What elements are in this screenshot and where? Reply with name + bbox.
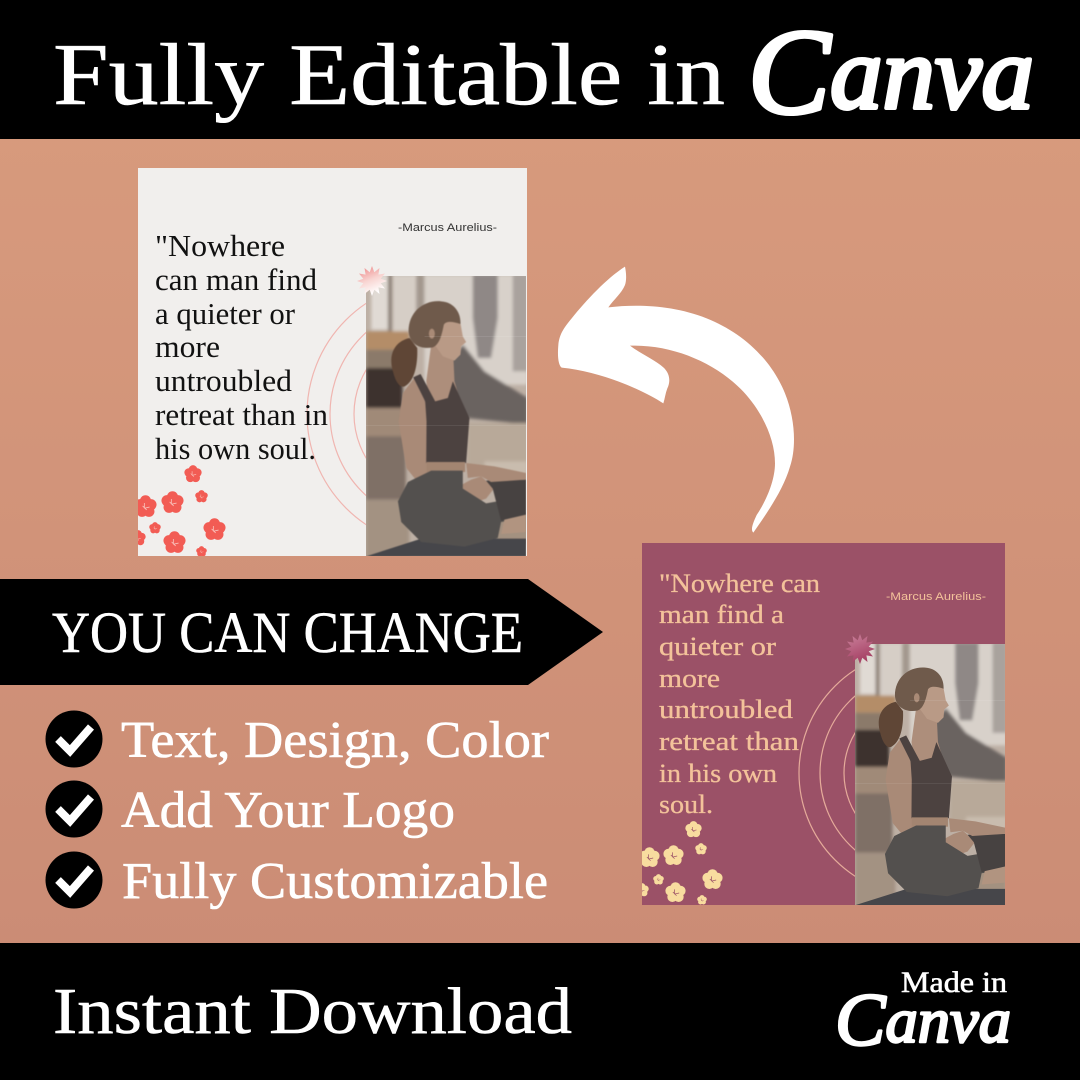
- instant download text: Instant Download: [53, 975, 572, 1048]
- title: Canva logo: anva: [830, 16, 1034, 131]
- arrow: curved white arrow: [558, 267, 794, 533]
- quote text: a quieter or: [155, 296, 296, 331]
- quote text: in his own: [659, 759, 777, 788]
- quote text: retreat than: [659, 727, 799, 756]
- quote text: man find a: [659, 600, 785, 629]
- icon: red flowers: [130, 465, 226, 556]
- panel: light quote card: [138, 168, 527, 556]
- icon: star burst: [845, 634, 875, 664]
- icon: star burst: [357, 266, 387, 296]
- quote text: [659, 569, 820, 819]
- made in Canva logo: C: [835, 979, 886, 1062]
- quote text: more: [659, 664, 720, 693]
- quote text: "Nowhere can: [659, 569, 820, 598]
- attribution: -Marcus Aurelius-: [886, 591, 986, 603]
- quote text: more: [155, 329, 220, 364]
- item: text, design, color: Text, Design, Color: [121, 712, 549, 769]
- quote text: can man find: [155, 262, 317, 297]
- made in Canva logo: anva: [885, 985, 1011, 1056]
- icon: cream flowers: [635, 821, 723, 904]
- photo: woman meditating: [366, 275, 528, 558]
- attribution: -Marcus Aurelius-: [398, 222, 497, 234]
- banner: you can change: [0, 579, 603, 685]
- banner heading: YOU CAN CHANGE: [52, 600, 523, 665]
- concentric arcs: [306, 303, 366, 526]
- item: add your logo: Add Your Logo: [121, 782, 455, 839]
- item: fully customizable: Fully Customizable: [122, 853, 548, 910]
- quote text: retreat than in: [155, 397, 328, 432]
- feature list: [46, 710, 549, 910]
- quote text: "Nowhere: [155, 228, 285, 263]
- title: Fully Editable in: Fully Editable in: [53, 27, 725, 124]
- bottom banner: [0, 943, 1080, 1080]
- made in text: Made in: [901, 966, 1007, 999]
- top banner: [0, 0, 1080, 140]
- quote text: [155, 228, 328, 466]
- quote text: untroubled: [155, 363, 293, 398]
- quote text: his own soul.: [155, 431, 316, 466]
- quote text: soul.: [659, 790, 713, 819]
- panel: plum quote card: [642, 543, 1005, 905]
- concentric arcs: [798, 669, 855, 877]
- quote text: untroubled: [659, 695, 793, 724]
- quote text: quieter or: [659, 632, 776, 661]
- title: Canva logo: C: [748, 5, 832, 140]
- photo: woman meditating: [855, 643, 1007, 907]
